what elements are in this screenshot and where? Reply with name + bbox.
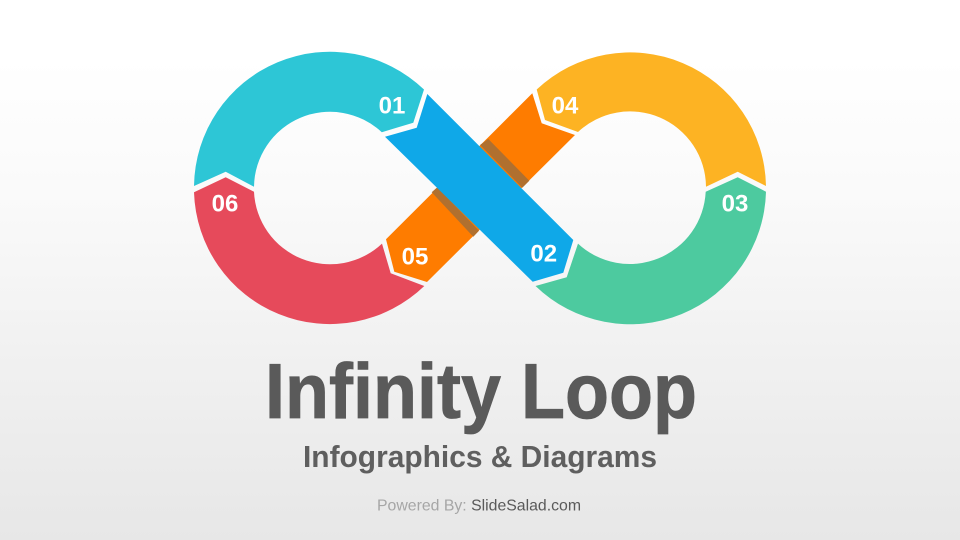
segment 04: yellow arc — [537, 52, 766, 187]
credit line: Powered By: SlideSalad.com — [377, 498, 581, 514]
subtitle: Infographics & Diagrams — [303, 439, 657, 474]
segment 01 and 02: blue diagonal band — [385, 94, 573, 282]
segment 05 and 04: orange diagonal band — [386, 93, 575, 282]
label 06: 06 — [212, 190, 238, 217]
shadow on orange band: lower — [432, 187, 479, 237]
label 05: 05 — [402, 243, 428, 270]
title: Infinity Loop — [265, 347, 697, 435]
label 02: 02 — [530, 240, 557, 268]
label 04: 04 — [552, 92, 579, 119]
segment 06: red arc — [194, 177, 424, 324]
segment 03: green arc — [536, 177, 766, 324]
shadow on orange band: upper — [480, 139, 529, 188]
label 03: 03 — [722, 190, 748, 217]
label 01: 01 — [379, 92, 405, 119]
segment 01: cyan arc — [194, 52, 424, 187]
infinity loop diagram — [194, 52, 766, 324]
